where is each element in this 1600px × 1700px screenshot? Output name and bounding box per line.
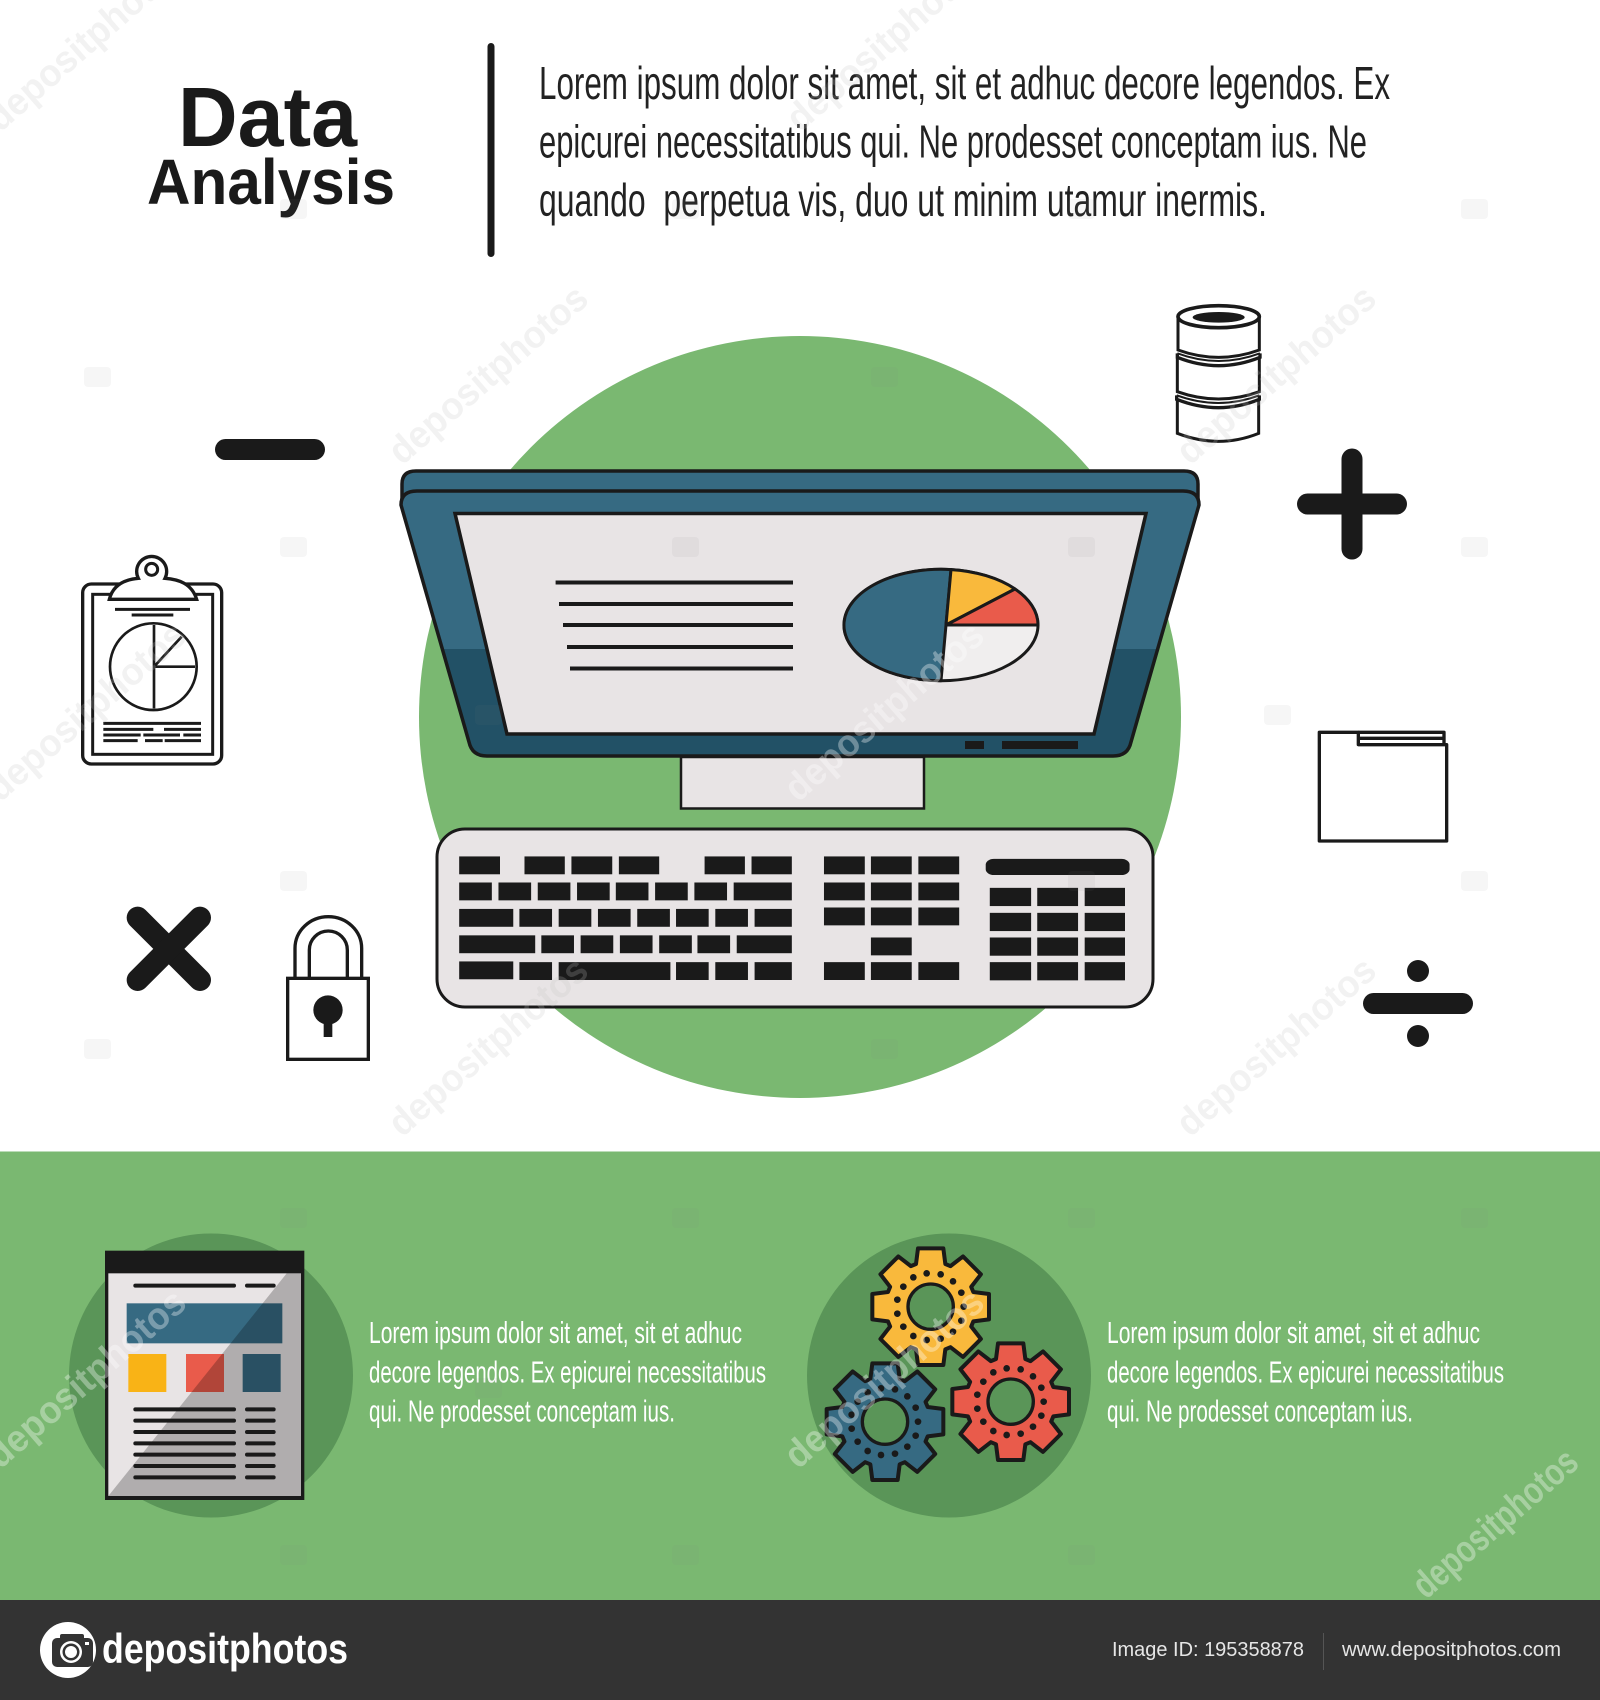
logo camera badge (40, 1622, 96, 1678)
icon: minus (215, 439, 325, 460)
header divider (488, 43, 494, 257)
title: Analysis (147, 146, 395, 218)
gears text: qui. Ne prodesset conceptam ius. (1107, 1394, 1413, 1428)
footer bar (0, 1600, 1600, 1700)
bottom green band (0, 1152, 1600, 1600)
document text (369, 1315, 766, 1428)
watermark camera marks (84, 199, 1488, 1565)
monitor stand (681, 757, 924, 808)
watermarks: depositphotos (380, 949, 597, 1145)
watermarks on artwork (0, 614, 1587, 1607)
monitor buttons (965, 741, 1078, 749)
green circle behind computer (419, 336, 1181, 1098)
watermarks: depositphotos (380, 277, 597, 473)
screen text lines (556, 580, 793, 670)
icon: multiply (138, 918, 200, 980)
icon: divide (1363, 960, 1473, 1047)
document text: decore legendos. Ex epicurei necessitatibus (369, 1354, 766, 1390)
keyboard keys (459, 856, 1130, 980)
icon: clipboard with pie chart (83, 556, 222, 764)
computer monitor (401, 471, 1199, 756)
panel: gears (807, 1234, 1504, 1518)
footer website: www.depositphotos.com (1341, 1639, 1561, 1661)
icon: gears (827, 1248, 1069, 1480)
logo wordmark: depositphotos (102, 1625, 348, 1672)
keyboard (437, 829, 1153, 1007)
watermarks (0, 0, 1385, 1145)
monitor back edge (402, 471, 1198, 505)
footer image id: Image ID: 195358878 (1112, 1639, 1304, 1661)
document text: Lorem ipsum dolor sit amet, sit et adhuc (369, 1315, 742, 1350)
watermarks on artwork: depositphotos (776, 1281, 993, 1477)
icon: database (1177, 306, 1260, 441)
gears text (1107, 1315, 1504, 1428)
title (147, 70, 395, 218)
watermarks: depositphotos (1168, 277, 1385, 473)
document text: qui. Ne prodesset conceptam ius. (369, 1394, 675, 1428)
icon: plus (1308, 459, 1396, 549)
screen pie chart (844, 569, 1038, 681)
monitor screen (455, 514, 1146, 734)
header text block: quando perpetua vis, duo ut minim utamur inermis. (539, 174, 1267, 226)
icon: web document (105, 1251, 304, 1500)
watermarks on artwork: depositphotos (776, 614, 993, 810)
footer logo (40, 1622, 348, 1678)
icon: folder (1319, 732, 1447, 841)
title: Data (178, 70, 358, 164)
header text block (539, 57, 1390, 226)
watermarks: depositphotos (1168, 949, 1385, 1145)
gears icon backdrop (807, 1234, 1091, 1518)
keyboard body (437, 829, 1153, 1007)
icon: padlock (288, 917, 368, 1059)
document icon backdrop (69, 1234, 353, 1518)
panel: document (69, 1234, 766, 1518)
monitor front bezel (401, 491, 1199, 756)
